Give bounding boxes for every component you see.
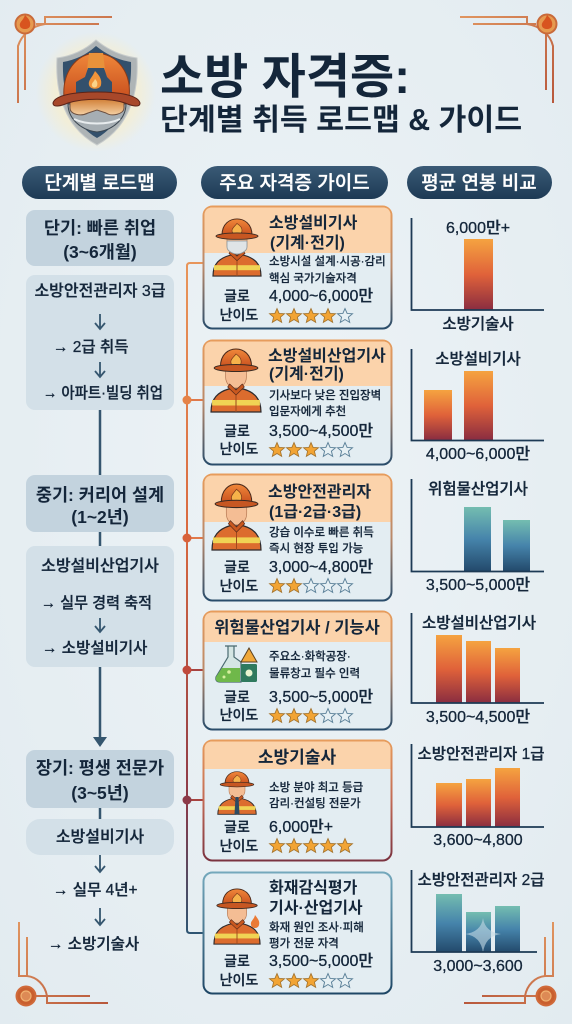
card text: 3,500~5,000만 — [269, 688, 373, 706]
corner ornament: top left — [16, 14, 112, 103]
short term heading: 단기: 빠른 취업 — [44, 218, 156, 238]
title — [160, 51, 522, 137]
card text: 감리·컨설팅 전문가 — [269, 797, 361, 810]
panel: roadmap column — [26, 210, 174, 953]
short term steps: → 아파트·빌딩 취업 — [43, 384, 163, 402]
heading: 주요 자격증 가이드 — [201, 166, 388, 199]
long term steps: → 실무 4년+ — [53, 881, 138, 899]
difficulty stars — [270, 839, 352, 852]
short term steps: → 2급 취득 — [53, 338, 129, 356]
bar chart: 위험물산업기사: 3,500~5,000만 — [426, 576, 530, 594]
card text: 화재감식평가 — [269, 879, 358, 897]
arrow: roadmap connectors — [93, 410, 107, 819]
card text — [220, 347, 386, 457]
panel: card 소방설비산업기사 — [204, 340, 392, 464]
card text — [214, 618, 380, 723]
bar chart: 위험물산업기사 — [412, 479, 544, 594]
card text: 입문자에게 추천 — [269, 404, 346, 418]
card text: 난이도 — [220, 972, 258, 988]
card text: 핵심 국가기술자격 — [269, 271, 357, 285]
bar chart: 소방안전관리자 1급: 소방안전관리자 1급 — [417, 745, 545, 763]
card text: 글로 — [224, 819, 250, 835]
card text: 평가 전문 자격 — [269, 937, 339, 950]
long term steps: → 소방기술사 — [48, 935, 139, 953]
card text: 글로 — [224, 423, 250, 439]
bar chart: 소방기술사: 소방기술사 — [442, 315, 514, 333]
bar chart: 소방안전관리자 2급: 3,000~3,600 — [433, 958, 523, 975]
heading: 평균 연봉 비교: 평균 연봉 비교 — [421, 172, 537, 194]
card text: 소방설비기사 — [269, 214, 358, 232]
card text: 소방 분야 최고 등급 — [269, 780, 364, 794]
card text: 난이도 — [220, 578, 258, 594]
card text: 물류창고 필수 인력 — [269, 667, 360, 680]
bar chart: 소방기술사 — [412, 218, 544, 333]
title: 단계별 취득 로드맵 & 가이드 — [160, 103, 522, 137]
card text: 기사·산업기사 — [269, 899, 363, 917]
card text: 소방시설 설계·시공·감리 — [269, 254, 386, 268]
panel: card 소방설비기사 — [204, 206, 392, 328]
bar chart: 소방안전관리자 2급: 소방안전관리자 2급 — [417, 871, 545, 889]
card text — [220, 483, 374, 594]
card text: 글로 — [224, 689, 250, 705]
panel: card 위험물산업기사 — [204, 612, 392, 730]
short term heading: (3~6개월) — [63, 242, 137, 262]
bar chart: 소방안전관리자 1급 — [412, 744, 545, 849]
icon: firefighter — [212, 484, 261, 550]
card text: 기사보다 낮은 진입장벽 — [269, 389, 381, 402]
card text: 주요소·화학공장· — [269, 650, 351, 663]
heading: 단계별 로드맵: 단계별 로드맵 — [44, 172, 155, 194]
mid term steps: 소방설비산업기사 — [41, 557, 159, 575]
panel: card 화재감식평가 — [204, 872, 392, 994]
difficulty stars — [270, 709, 352, 722]
bar chart: 소방기술사: 6,000만+ — [446, 219, 510, 237]
card text: 난이도 — [220, 707, 258, 723]
corner ornament: top right — [460, 14, 556, 103]
icon: firefighter with flame — [214, 889, 260, 944]
card text: 난이도 — [220, 307, 258, 323]
card text — [220, 879, 373, 988]
long term heading — [26, 750, 174, 808]
mid term heading: (1~2년) — [71, 507, 129, 527]
card text: 난이도 — [220, 838, 258, 854]
card text: 소방안전관리자 — [268, 483, 371, 501]
long term steps — [26, 819, 174, 953]
panel: card 소방기술사 — [204, 740, 392, 860]
card text: 소방설비산업기사 — [268, 347, 386, 365]
icon: firefighter helmet shield emblem — [36, 32, 156, 152]
heading: 주요 자격증 가이드: 주요 자격증 가이드 — [219, 172, 370, 194]
heading: 평균 연봉 비교 — [407, 166, 552, 199]
card text: (기계·전기) — [269, 365, 344, 383]
bar chart: 소방안전관리자 2급 — [412, 870, 545, 975]
difficulty stars — [270, 309, 352, 322]
bar chart: 소방설비기사: 소방설비기사 — [435, 350, 521, 368]
icon: firefighter — [211, 349, 261, 412]
icon: firefighter with mask — [213, 219, 261, 276]
bar chart: 소방설비산업기사 — [412, 613, 544, 726]
card text: 글로 — [224, 953, 250, 969]
card text: 즉시 현장 투입 가능 — [269, 542, 364, 555]
difficulty stars — [270, 974, 352, 987]
bar chart: 소방설비기사 — [412, 349, 544, 463]
card text: (기계·전기) — [270, 234, 345, 252]
card text: 화재 원인 조사·피해 — [269, 920, 364, 934]
card text: (1급·2급·3급) — [269, 504, 361, 521]
mid term steps: → 실무 경력 축적 — [41, 594, 152, 612]
mid term heading: 중기: 커리어 설계 — [36, 485, 164, 505]
card text — [220, 748, 364, 854]
corner ornament: bottom right — [464, 922, 556, 1006]
bar chart: 소방설비산업기사: 3,500~4,500만 — [426, 708, 530, 726]
card text: 3,500~4,500만 — [269, 422, 373, 440]
icon: firefighter with tie — [218, 772, 256, 814]
card text: 글로 — [224, 559, 250, 575]
card text: 4,000~6,000만 — [269, 287, 373, 305]
short term steps: 소방안전관리자 3급 — [34, 282, 166, 300]
card text: 글로 — [224, 288, 250, 304]
card text: 강습 이수로 빠른 취득 — [269, 526, 374, 539]
long term heading: 장기: 평생 전문가 — [36, 758, 164, 778]
mid term heading — [26, 475, 174, 532]
card text: 위험물산업기사 / 기능사 — [214, 618, 380, 637]
bar chart: 위험물산업기사: 위험물산업기사 — [428, 480, 528, 498]
card text: 3,000~4,800만 — [269, 558, 373, 576]
short term heading — [26, 210, 174, 266]
card text: 6,000만+ — [269, 818, 333, 836]
difficulty stars — [270, 443, 352, 456]
corner ornament: bottom left — [16, 922, 108, 1006]
difficulty stars — [270, 579, 352, 592]
mid term steps: → 소방설비기사 — [42, 639, 147, 657]
bar chart: 소방설비기사: 4,000~6,000만 — [426, 445, 530, 463]
icon: chemical flask and hazard signs — [216, 646, 257, 682]
card text: 소방기술사 — [258, 748, 336, 767]
connector tree to certificate cards — [182, 263, 203, 933]
short term steps — [26, 275, 174, 410]
panel: card 소방안전관리자 — [204, 474, 392, 600]
card text: 3,500~5,000만 — [269, 952, 373, 970]
bar chart: 소방안전관리자 1급: 3,600~4,800 — [433, 832, 523, 849]
bar chart: 소방설비산업기사: 소방설비산업기사 — [422, 614, 536, 632]
card text — [220, 214, 386, 323]
heading: 단계별 로드맵 — [22, 166, 177, 199]
long term heading: (3~5년) — [71, 783, 129, 803]
mid term steps — [26, 546, 174, 667]
card text: 난이도 — [220, 441, 258, 457]
long term steps: 소방설비기사 — [56, 828, 144, 846]
title: 소방 자격증: — [160, 51, 410, 104]
